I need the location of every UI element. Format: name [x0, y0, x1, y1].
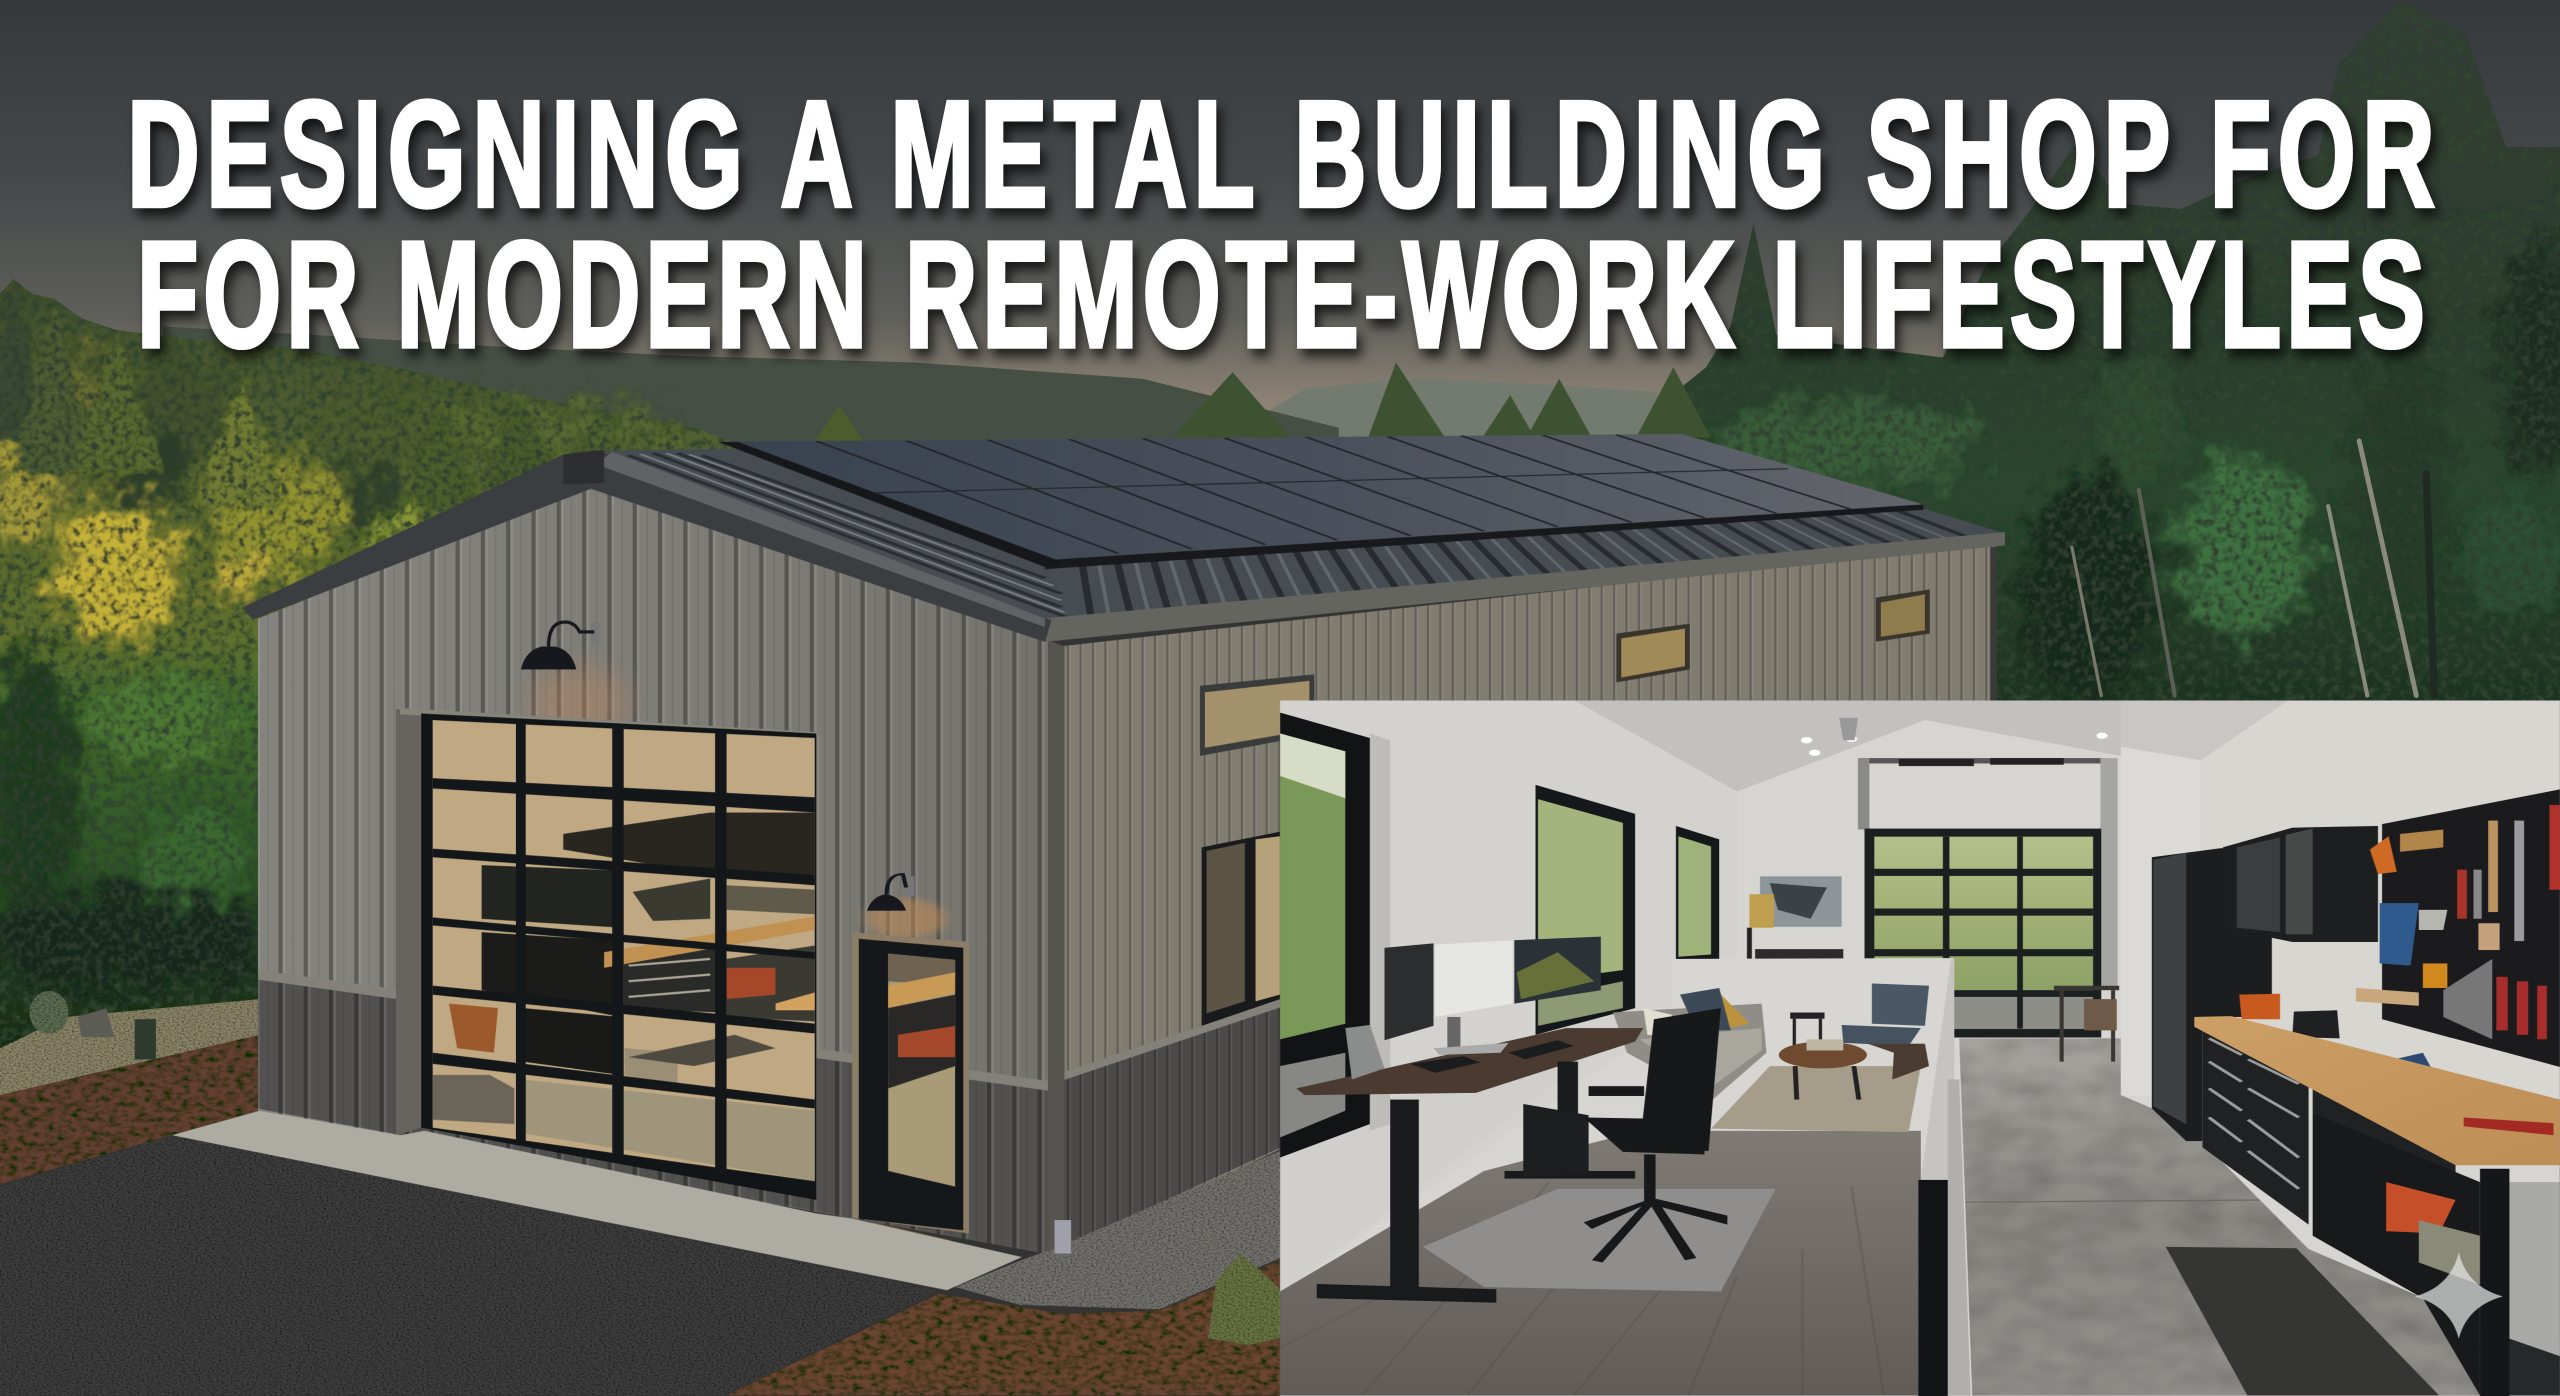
metal building exterior	[258, 487, 1997, 1257]
roof eave fascia	[1045, 532, 2005, 642]
door mat	[829, 1222, 951, 1254]
sunlit tree crowns	[0, 351, 669, 988]
side table	[1790, 1012, 1824, 1050]
triple monitors	[1384, 937, 1601, 1055]
shop back tables	[2054, 986, 2119, 1062]
keyboard and desk accessories	[1345, 1025, 1574, 1079]
mid-distance conifers	[1172, 362, 1711, 438]
asphalt driveway	[0, 1135, 939, 1395]
left window two	[1536, 785, 1635, 1035]
left window one	[1280, 713, 1390, 1158]
can	[1055, 1220, 1071, 1254]
side wall	[1058, 542, 1995, 1254]
drawer chest	[2202, 1028, 2309, 1225]
forest: right side tall trees	[1636, 0, 2560, 702]
title line two: FOR MODERN REMOTE-WORK LIFESTYLES	[137, 212, 2425, 379]
glass garage door	[421, 713, 816, 1200]
ground strip behind building left	[0, 991, 260, 1184]
lamp glow above door	[865, 899, 947, 939]
standing desk	[1296, 1028, 1643, 1303]
wall lamp on gable	[521, 622, 629, 738]
wall art	[1760, 876, 1842, 927]
area rug	[1711, 1066, 1921, 1132]
chair mat	[1423, 1189, 1776, 1291]
office: left wall and ceiling	[1280, 832, 1281, 1292]
shop right wall	[2201, 698, 2560, 1169]
wainscot panels	[258, 970, 1280, 1254]
background sky	[0, 0, 2560, 441]
entry door	[852, 932, 969, 1233]
left window three	[1676, 826, 1719, 959]
birch trunks	[2072, 441, 2434, 696]
wall lamp by door	[867, 874, 914, 911]
half wall	[1676, 958, 1954, 1038]
shop concrete floor	[1959, 1038, 2560, 1395]
lower building details	[0, 708, 1280, 1395]
lower bench storage	[2313, 1084, 2560, 1396]
rear glass garage door	[1864, 829, 2101, 1037]
bench items	[2239, 994, 2435, 1075]
title line one: DESIGNING A METAL BUILDING SHOP FOR	[127, 71, 2434, 239]
shop wall column	[2121, 698, 2292, 760]
distant hills	[163, 327, 1657, 457]
sparkle watermark	[2415, 1252, 2503, 1339]
divider rail	[1918, 959, 1971, 1396]
interior inset photo	[1280, 698, 2560, 1396]
ceiling lights	[1801, 733, 2108, 756]
door opener track	[1839, 718, 2118, 986]
tall cabinet	[2152, 848, 2272, 1141]
floor lamp and easel	[1747, 894, 1843, 959]
shrub	[1208, 1254, 1280, 1345]
title	[127, 71, 2434, 379]
back wall	[1737, 720, 2104, 963]
roof plane	[596, 434, 2005, 623]
armchair	[1842, 983, 1929, 1079]
roof with solar array	[242, 434, 2005, 642]
concrete apron	[171, 1111, 1022, 1290]
corner trim	[1048, 640, 1064, 1257]
upper side-wall windows	[1200, 589, 1930, 756]
mulch bed	[727, 1260, 1280, 1395]
solar panels	[718, 434, 1923, 560]
tall fir against sky	[2328, 0, 2557, 229]
ceiling	[1570, 698, 2121, 792]
anti-fatigue mat	[2166, 1247, 2439, 1395]
red tool on bench	[2464, 1117, 2553, 1135]
gravel bed	[955, 1151, 1280, 1309]
live-edge coffee table	[1779, 1039, 1867, 1100]
office wood floor	[1280, 1131, 1921, 1395]
task chair	[1584, 1008, 1727, 1262]
gable rake trim	[242, 450, 1051, 642]
pegboard with tools	[2356, 789, 2560, 1067]
sofa	[1613, 988, 1767, 1100]
side wall lower window	[1202, 832, 1280, 1026]
conifers	[0, 279, 702, 542]
forest: left slope	[0, 279, 865, 1078]
wall cabinets	[2223, 826, 2378, 942]
front gable wall	[258, 487, 1048, 1254]
butcher-block workbench top	[2194, 1016, 2560, 1165]
door jamb pillar	[396, 709, 424, 1135]
